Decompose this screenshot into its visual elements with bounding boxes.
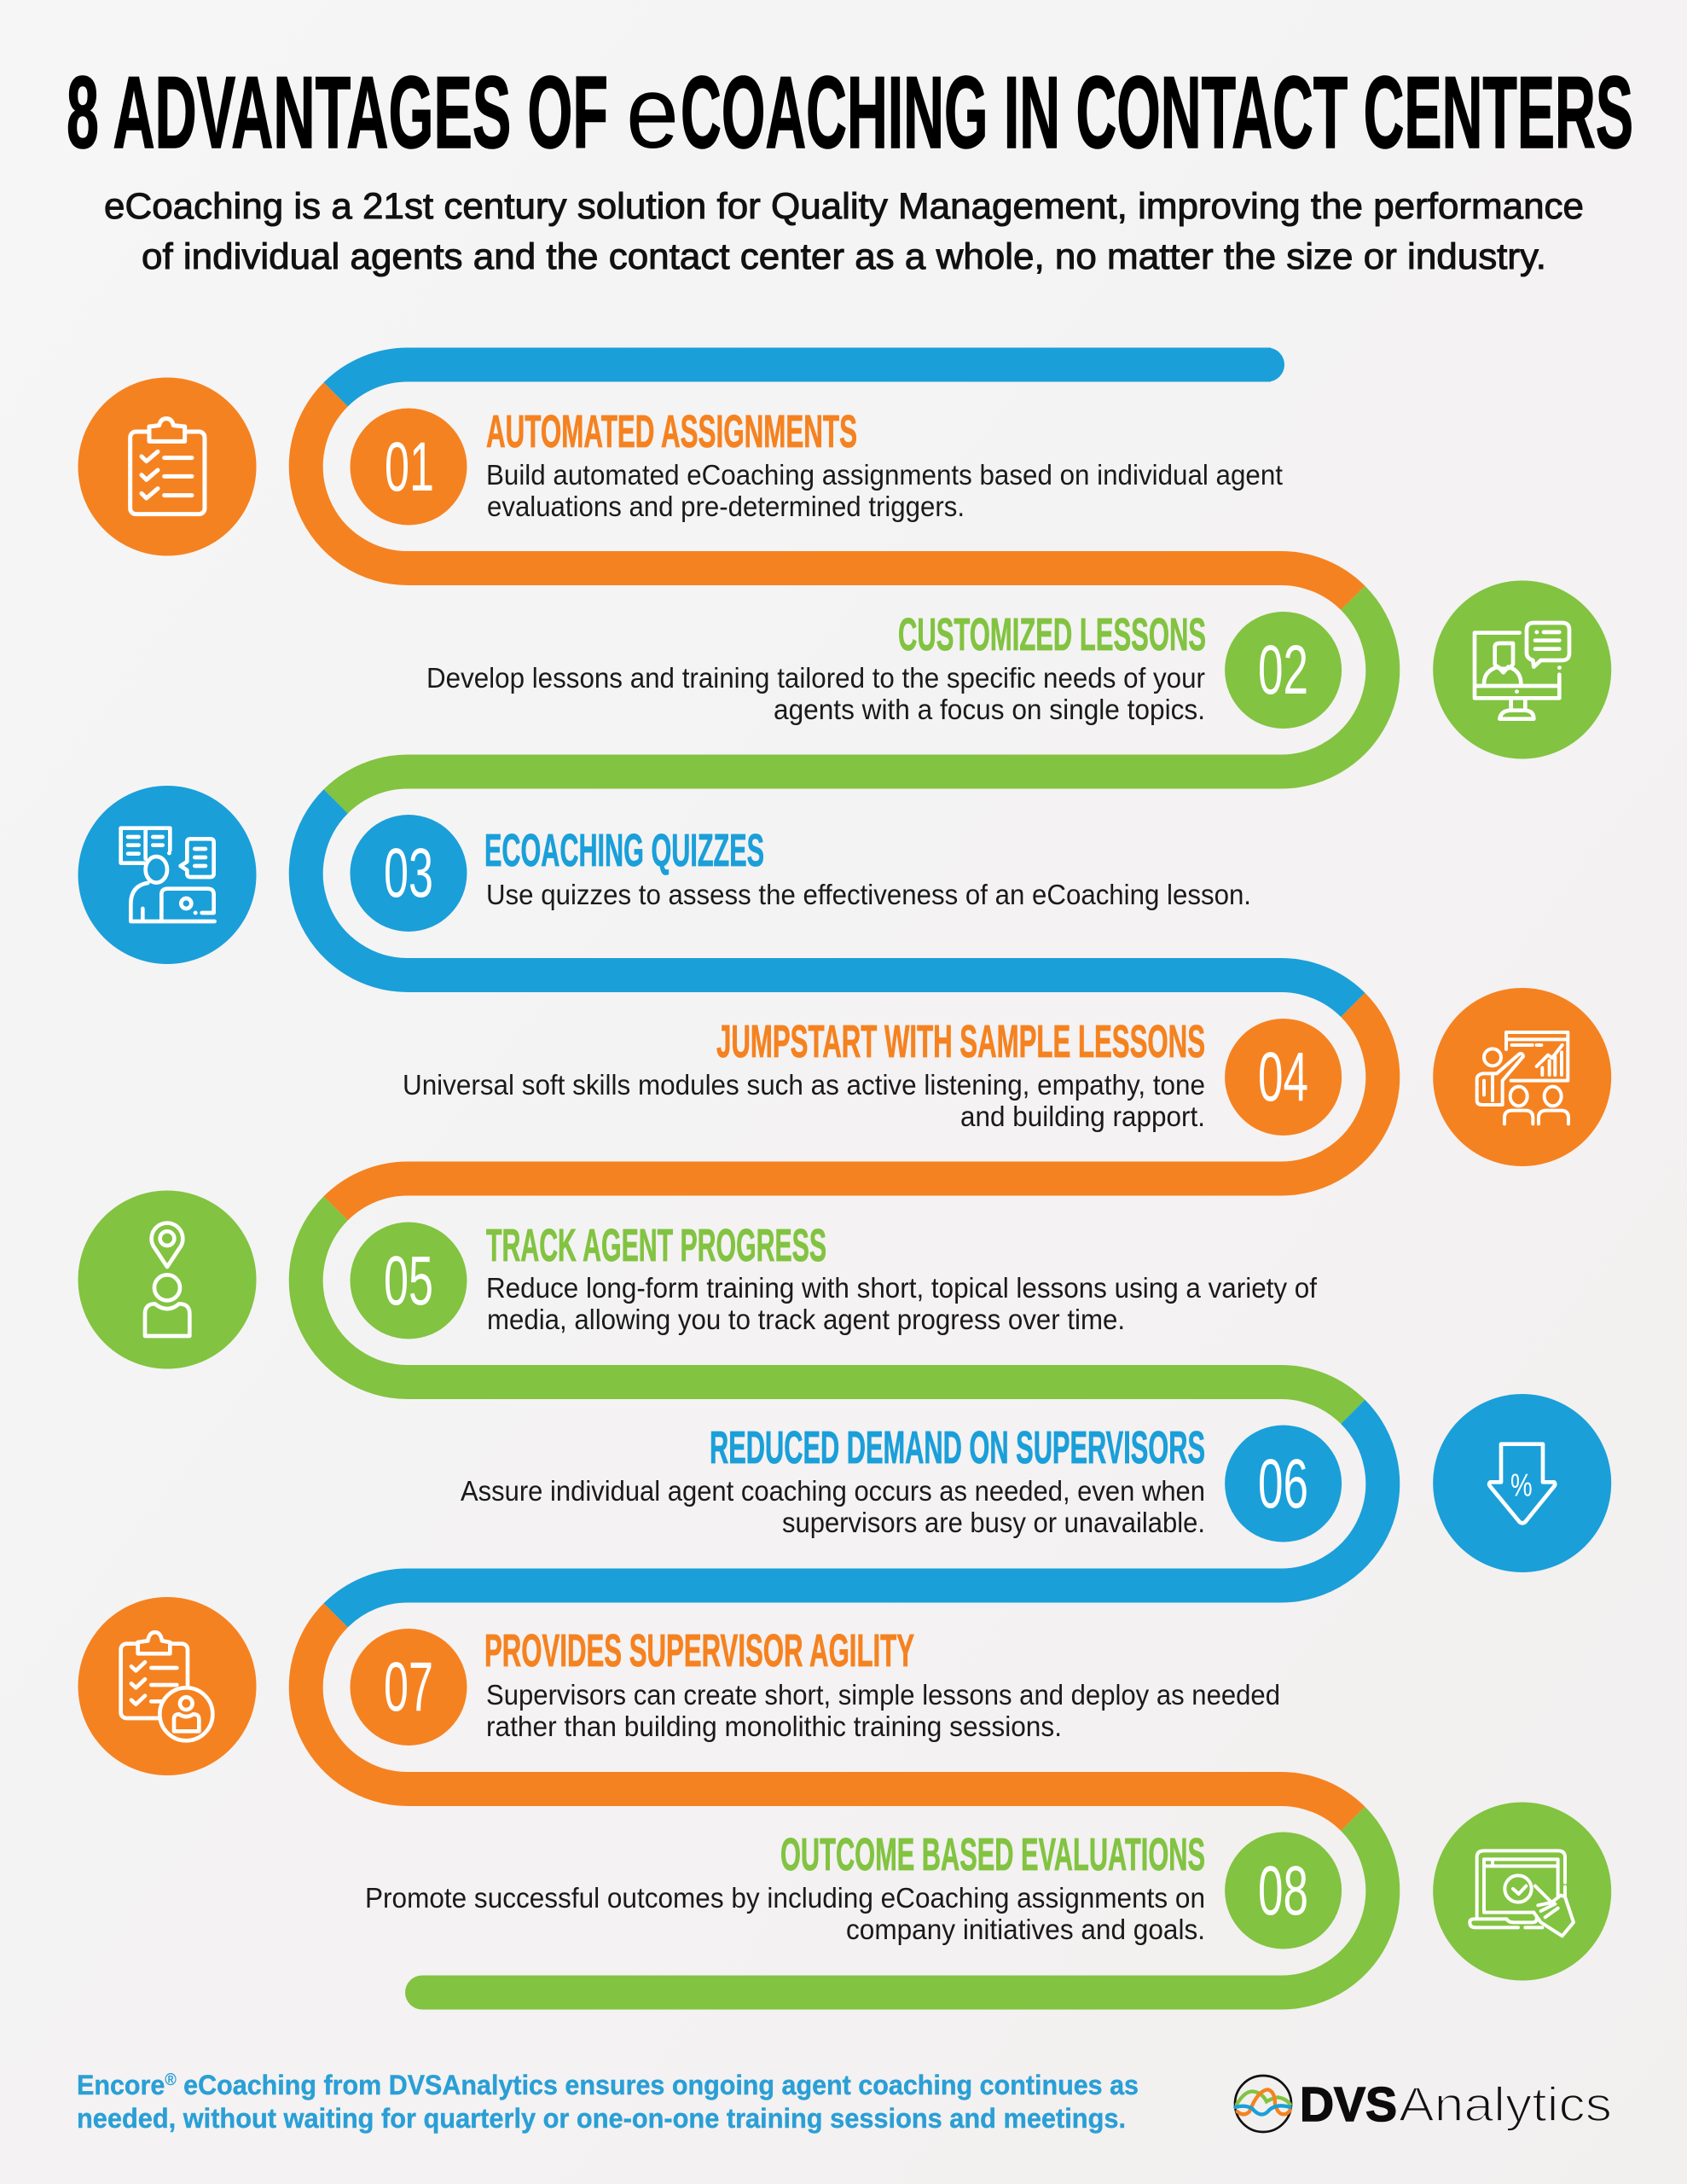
item 1: automated assignments: AUTOMATED ASSIGNMENTS [486,406,857,457]
icon: online tutor on monitor [1475,623,1569,719]
footer statement: needed, without waiting for quarterly or one-on-one training sessions and meetings. [77,2103,1126,2134]
item 6: reduced demand on supervisors: REDUCED DEMAND ON SUPERVISORS [710,1422,1205,1473]
item 8: outcome based evaluations: Promote successful outcomes by including eCoaching assignments on [365,1882,1205,1914]
item 7: provides supervisor agility: 07 [384,1648,433,1726]
icon: presenter and audience [1477,1032,1568,1124]
item 3: ecoaching quizzes: Use quizzes to assess the effectiveness of an eCoaching lesson. [486,879,1251,910]
item 5: track agent progress: TRACK AGENT PROGRESS [486,1220,826,1271]
item 3: ecoaching quizzes: 03 [384,834,433,912]
subtitle [104,186,1584,277]
item 8: outcome based evaluations: company initiatives and goals. [846,1914,1205,1945]
item 8: outcome based evaluations: 08 [1258,1852,1308,1930]
title: e [626,55,679,170]
item 4: jumpstart with sample lessons: JUMPSTART WITH SAMPLE LESSONS [716,1016,1205,1067]
logo: DVSAnalytics: Analytics [1399,2077,1612,2132]
item 1: automated assignments: evaluations and pre-determined triggers. [487,491,965,522]
subtitle: of individual agents and the contact center as a whole, no matter the size or industry. [142,236,1546,277]
item 3: ecoaching quizzes: ECOACHING QUIZZES [484,825,764,876]
footer statement: ® [165,2071,177,2089]
item 7: provides supervisor agility: Supervisors can create short, simple lessons and deploy as needed [486,1679,1280,1711]
item 4: jumpstart with sample lessons: 04 [1258,1038,1308,1116]
logo: DVSAnalytics [1235,2076,1612,2132]
footer statement: eCoaching from DVSAnalytics ensures ongoing agent coaching continues as [177,2070,1139,2100]
subtitle: eCoaching is a 21st century solution for Quality Management, improving the performance [104,186,1584,227]
item 6: reduced demand on supervisors: 06 [1258,1445,1308,1523]
logo: DVSAnalytics: DVS [1300,2077,1397,2132]
item 5: track agent progress: Reduce long-form training with short, topical lessons using a variety of [486,1272,1318,1304]
item 2: customized lessons: 02 [1258,631,1308,709]
item 5: track agent progress [78,1191,1318,1368]
item 1: automated assignments: 01 [385,428,434,506]
item 2: customized lessons: agents with a focus on single topics. [774,694,1205,725]
item 6: reduced demand on supervisors: supervisors are busy or unavailable. [782,1507,1205,1538]
item 7: provides supervisor agility: rather than building monolithic training sessions. [486,1711,1062,1742]
icon: down arrow with percent [1489,1444,1555,1523]
icon: laptop with hand and check [1470,1850,1574,1936]
icon: checklist with user badge [121,1632,212,1740]
icon: down arrow with percent: % [1510,1467,1533,1502]
item 8: outcome based evaluations: OUTCOME BASED EVALUATIONS [780,1829,1205,1880]
icon: person with location pin [145,1223,189,1336]
icon: clipboard checklist [130,419,205,514]
item 5: track agent progress: 05 [384,1242,433,1320]
item 1: automated assignments [78,377,1283,556]
serpentine path [306,365,1383,1993]
item 2: customized lessons [426,580,1611,759]
item 2: customized lessons: CUSTOMIZED LESSONS [898,609,1206,660]
item 7: provides supervisor agility [78,1597,1280,1775]
icon: learner with book and laptop [121,828,215,921]
title [67,55,1633,170]
item 1: automated assignments: Build automated eCoaching assignments based on individual agent [486,459,1283,491]
footer statement: Encore [77,2070,169,2100]
item 8: outcome based evaluations [365,1802,1611,1981]
item 7: provides supervisor agility: PROVIDES SUPERVISOR AGILITY [484,1625,914,1676]
item 6: reduced demand on supervisors [461,1394,1611,1572]
item 3: ecoaching quizzes [78,786,1251,964]
title: 8 ADVANTAGES OF [67,55,608,170]
item 6: reduced demand on supervisors: Assure individual agent coaching occurs as needed, even when [461,1475,1205,1507]
item 2: customized lessons: Develop lessons and training tailored to the specific needs of your [426,662,1205,694]
item 4: jumpstart with sample lessons: and building rapport. [960,1101,1205,1132]
logo mark [1235,2076,1291,2132]
item 4: jumpstart with sample lessons [403,988,1611,1166]
item 5: track agent progress: media, allowing you to track agent progress over time. [487,1304,1125,1335]
footer statement [77,2070,1139,2134]
item 4: jumpstart with sample lessons: Universal soft skills modules such as active listening, empathy, tone [403,1069,1205,1101]
